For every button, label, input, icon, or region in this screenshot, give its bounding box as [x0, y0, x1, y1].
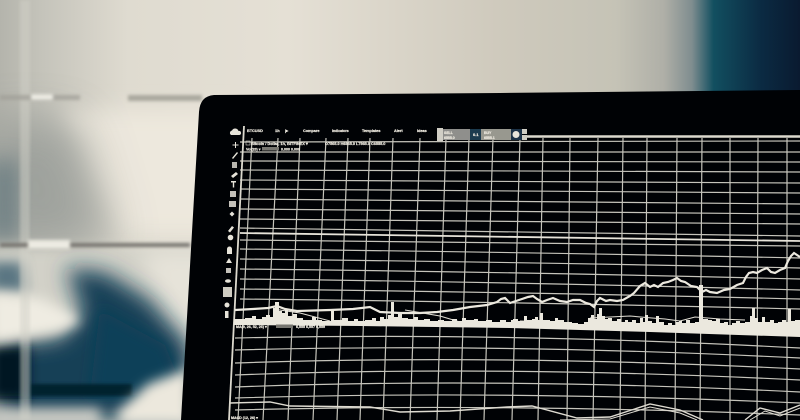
buy and sell widget: 0.1	[473, 132, 479, 137]
toolbar: |▸	[285, 128, 289, 133]
buy and sell widget: 6555.1	[484, 136, 495, 140]
dark blue reflection	[0, 268, 190, 420]
toolbar: Indicators	[332, 129, 349, 133]
moving average line	[273, 309, 745, 322]
toolbar rule and chart left axis	[229, 126, 800, 420]
buy and sell widget: SELL	[444, 131, 454, 135]
chart legend: O7565.0 H6565.0 L7565.0 C6555.0	[325, 142, 385, 146]
volume pane legend: MA(9, 26, 52, 26) ▾	[236, 325, 268, 329]
toolbar	[247, 128, 427, 133]
price line	[235, 253, 800, 313]
toolbar: 1h	[275, 128, 280, 133]
laptop bezel	[181, 90, 800, 420]
volume pane legend: 6,555 6,557 6,559	[296, 325, 325, 329]
pale reflection	[0, 292, 80, 342]
toolbar: Ideas	[417, 129, 427, 133]
chart screen	[223, 126, 800, 420]
toolbar: Alert	[394, 129, 403, 133]
volume pane legend	[236, 324, 325, 329]
volume bars and baseline	[234, 285, 800, 337]
lower pane legend: MACD (12, 26) ▾	[231, 416, 259, 420]
chart legend: Bitcoin / Dollar, 1h, BITFINEX ▾	[251, 141, 309, 146]
toolbar: BTCUSD	[247, 129, 263, 133]
buy and sell widget: 6555.0	[444, 136, 455, 140]
chart legend: Vol(20) ▾	[246, 148, 262, 152]
chart grid	[235, 138, 800, 420]
window frame bars	[20, 0, 30, 420]
buy and sell widget	[437, 128, 527, 141]
buy and sell widget: BUY	[484, 131, 492, 135]
toolbar: Templates	[362, 129, 380, 133]
lower indicator line	[230, 402, 800, 420]
chart legend: 0.000 0.000	[281, 148, 300, 152]
drawing tools sidebar	[223, 129, 241, 318]
toolbar: Compare	[303, 129, 319, 133]
chart legend	[246, 141, 385, 152]
